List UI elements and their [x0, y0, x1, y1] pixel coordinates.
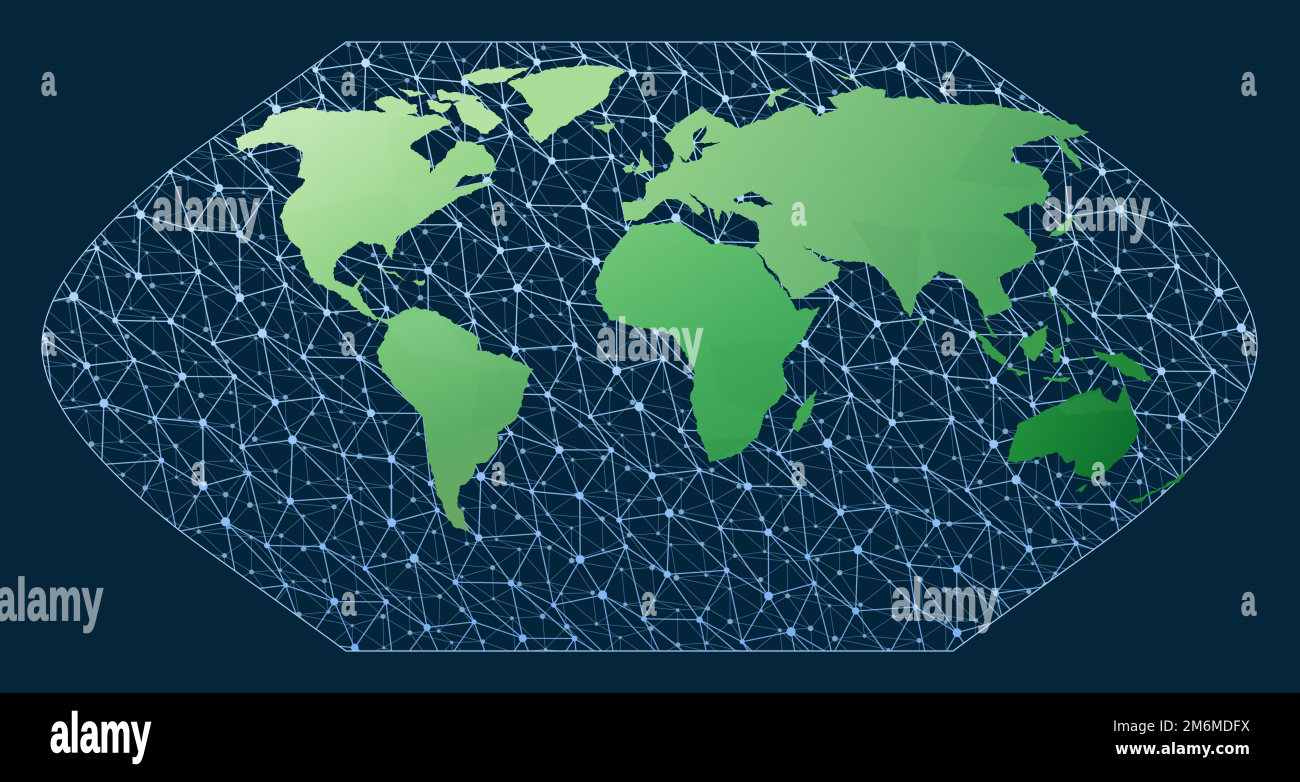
- small watermark letters: a: [641, 57, 656, 104]
- Caribbean islands: [377, 268, 425, 285]
- Eurasia: [620, 85, 1095, 325]
- footer bar: [0, 693, 1300, 782]
- Iceland: [593, 123, 615, 132]
- small watermark letters: a: [191, 447, 206, 494]
- small watermark letters: a: [41, 317, 56, 364]
- small watermark letters: a: [791, 447, 806, 494]
- South America: [372, 306, 534, 532]
- Africa: [590, 218, 825, 468]
- large watermark words: alamy: [891, 567, 998, 633]
- small watermark letters: a: [341, 57, 356, 104]
- network mesh: [40, 40, 1260, 654]
- Tasmania and New Zealand: [1075, 472, 1187, 503]
- Japan: [1048, 215, 1075, 238]
- Sri Lanka: [918, 317, 923, 327]
- Australia: [1006, 384, 1140, 480]
- small watermark letters: a: [1091, 447, 1106, 494]
- small watermark letters: a: [41, 57, 56, 104]
- Southeast Asia: [972, 285, 1152, 382]
- European islands and Arctic Russia: [623, 73, 862, 175]
- Arctic Canada islands: [373, 67, 530, 135]
- large watermark words: alamy: [152, 177, 260, 243]
- North America: [215, 100, 505, 325]
- image id: Image ID: 2M6MDFX: [1113, 719, 1250, 735]
- large watermark words: [0, 177, 1150, 633]
- small watermark letters: a: [941, 57, 956, 104]
- small watermark letters: a: [641, 577, 656, 624]
- website: www.alamy.com: [1115, 739, 1250, 758]
- small watermark letters: a: [1241, 57, 1256, 104]
- small watermark letters: [41, 57, 1256, 624]
- small watermark letters: a: [341, 577, 356, 624]
- small watermark letters: a: [491, 447, 506, 494]
- small watermark letters: a: [1241, 577, 1256, 624]
- Madagascar: [792, 388, 817, 432]
- small watermark letters: a: [791, 187, 806, 234]
- small watermark letters: a: [941, 317, 956, 364]
- small watermark letters: a: [491, 187, 506, 234]
- large watermark words: alamy: [0, 567, 103, 633]
- map outline: [42, 42, 1257, 651]
- continents: [215, 65, 1187, 535]
- Greenland: [507, 65, 627, 143]
- small watermark letters: a: [1241, 317, 1256, 364]
- large watermark words: alamy: [1042, 177, 1150, 243]
- small watermark letters: a: [341, 317, 356, 364]
- watermarks: [0, 57, 1256, 633]
- footer logo: alamy: [50, 701, 151, 764]
- large watermark words: alamy: [596, 307, 703, 373]
